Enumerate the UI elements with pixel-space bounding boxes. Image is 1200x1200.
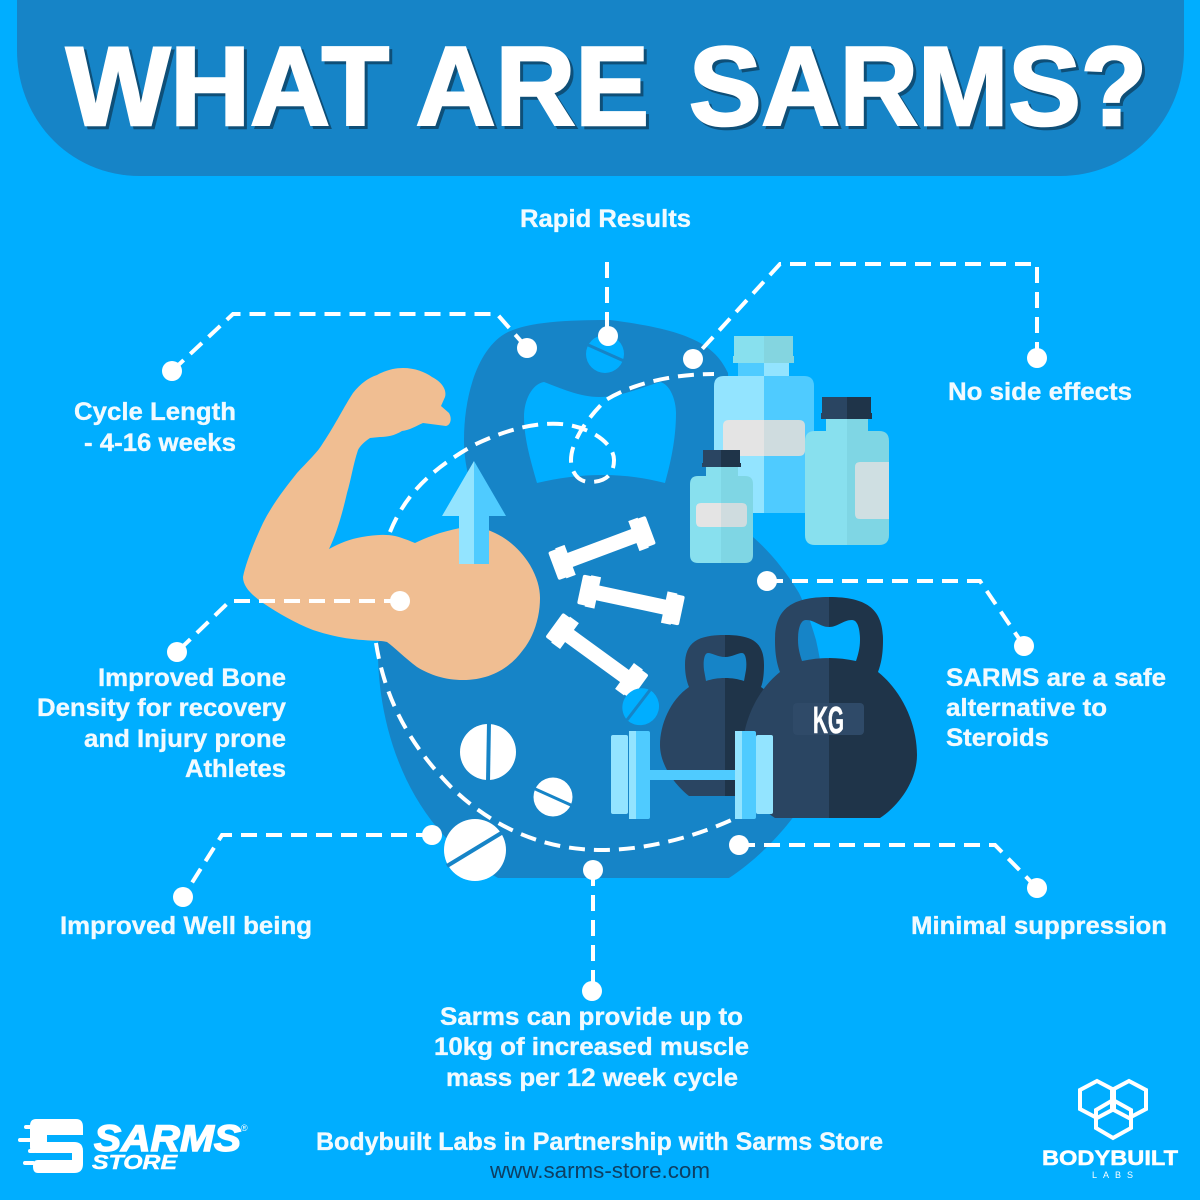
logo registered mark: ® (241, 1123, 248, 1133)
logo word STORE: STORE (92, 1152, 178, 1174)
icon: white dumbbell 2 (577, 574, 685, 626)
text: cycle length: - 4-16 weeks (84, 429, 236, 457)
icon: right bottle (805, 397, 889, 545)
text: safe alternative (946, 664, 1166, 752)
icon: small bottle (690, 450, 753, 563)
icon: up arrow on bicep (442, 461, 506, 564)
callout line: well being (173, 825, 442, 907)
text: bone density: Density for recovery (37, 694, 286, 722)
callout line: rapid results (598, 262, 618, 346)
callout line: safe alternative (757, 571, 1034, 656)
icon: large bottle (714, 336, 814, 513)
icon: blue pill under dumbbell (622, 688, 659, 725)
title: WHAT ARE (66, 24, 649, 149)
logo S mark (18, 1119, 83, 1173)
text: minimal suppression: Minimal suppression (911, 912, 1167, 940)
icon: white dumbbell 1 (548, 515, 656, 581)
icon: small kettlebell (660, 635, 790, 796)
callout line: cycle length (162, 314, 537, 381)
icon: top pill (586, 335, 624, 373)
callout line: no side effects (683, 264, 1047, 369)
text: bone density: Improved Bone (98, 664, 286, 692)
title: SARMS? (689, 24, 1147, 149)
callout line: bone density (167, 591, 410, 662)
text: no side effects: No side effects (948, 378, 1132, 406)
text: cycle length (74, 398, 236, 457)
header banner (17, 0, 1184, 176)
dashed loop: lower arc (376, 643, 738, 850)
callout line: minimal suppression (729, 835, 1047, 898)
icon: white pill large (444, 819, 506, 881)
text: muscle mass (434, 1003, 749, 1092)
icon: light blue dumbbell (611, 731, 773, 819)
text: bone density (37, 664, 286, 783)
text: safe alternative: Steroids (946, 724, 1049, 752)
text: safe alternative: SARMS are a safe (946, 664, 1166, 692)
icon: white pill small (533, 778, 573, 816)
text: safe alternative: alternative to (946, 694, 1107, 722)
text: well being: Improved Well being (60, 912, 312, 940)
KG text: KG (813, 700, 844, 742)
logo: bodybuilt labs (1042, 1081, 1178, 1180)
text: muscle mass: Sarms can provide up to (440, 1003, 743, 1031)
logo: sarms store (18, 1118, 248, 1174)
text: bone density: Athletes (185, 755, 286, 783)
callout line: muscle mass (582, 860, 603, 1001)
text: website: www.sarms-store.com (489, 1158, 710, 1183)
text: muscle mass: mass per 12 week cycle (446, 1064, 738, 1092)
icon: large KG kettlebell (742, 597, 917, 818)
text: muscle mass: 10kg of increased muscle (434, 1033, 749, 1061)
icon: flexed arm (243, 368, 540, 680)
logo word SARMS: SARMS (94, 1118, 241, 1159)
text: cycle length: Cycle Length (74, 398, 236, 426)
text: rapid results: Rapid Results (520, 205, 691, 233)
logo hexagons (1080, 1081, 1146, 1138)
dashed loop: upper arc (390, 374, 714, 532)
icon: white dumbbell 3 (545, 612, 649, 700)
text: bone density: and Injury prone (84, 725, 286, 753)
KG plate (793, 703, 864, 735)
icon: white pill medium (460, 722, 516, 782)
large background kettlebell (378, 320, 825, 878)
text: partnership: Bodybuilt Labs in Partnership with Sarms Store (316, 1128, 883, 1156)
logo word BODYBUILT: BODYBUILT (1042, 1147, 1178, 1170)
logo word LABS: LABS (1092, 1170, 1133, 1180)
title (66, 24, 1147, 149)
